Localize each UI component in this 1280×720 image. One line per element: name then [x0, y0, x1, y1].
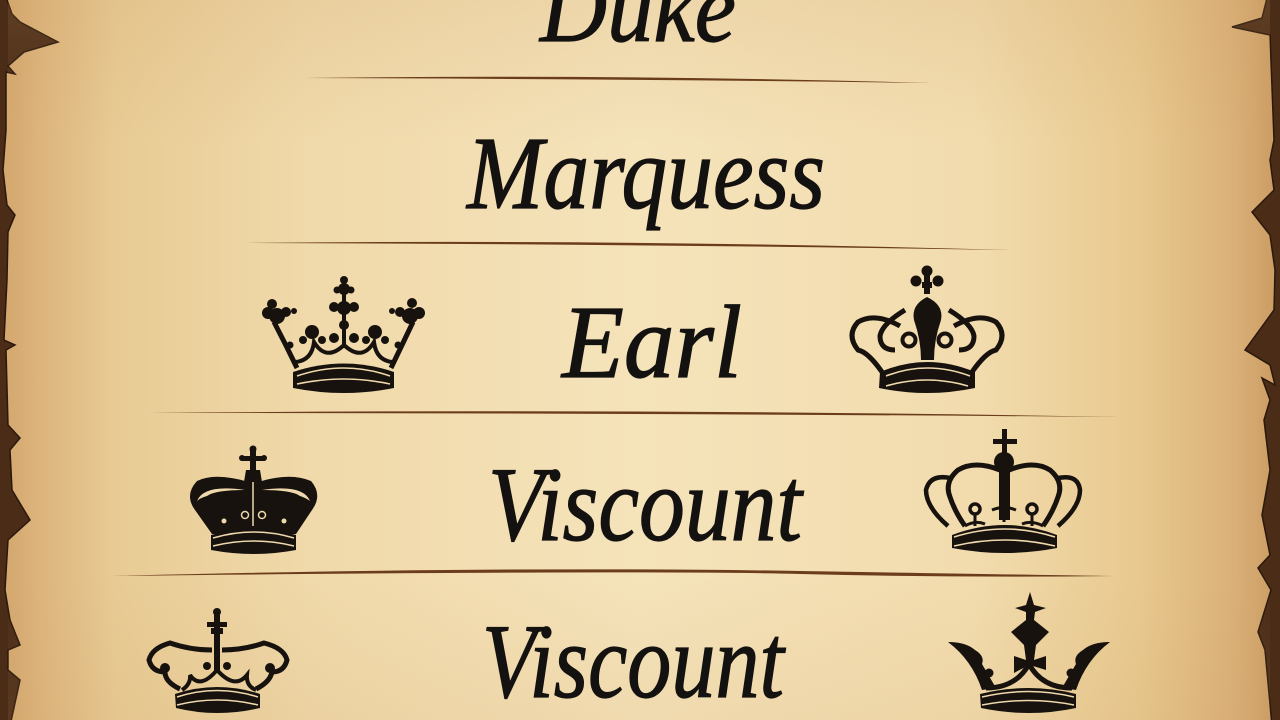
- icon: crown, lower Viscount right: [948, 592, 1110, 713]
- icon: crown, lower Viscount left: [149, 608, 287, 713]
- icon: crown, Earl right: [852, 266, 1002, 393]
- icon: crown, upper Viscount right: [926, 429, 1080, 553]
- rank label: Earl: Earl: [560, 285, 742, 400]
- rank label: Marquess: Marquess: [465, 116, 825, 231]
- rank label: Viscount lower: Viscount: [482, 603, 786, 720]
- icon: crown, Earl left: [262, 276, 425, 393]
- rank label: Viscount upper: Viscount: [488, 446, 804, 563]
- icon: crown, upper Viscount left: [190, 446, 317, 554]
- divider lines: [112, 77, 1120, 577]
